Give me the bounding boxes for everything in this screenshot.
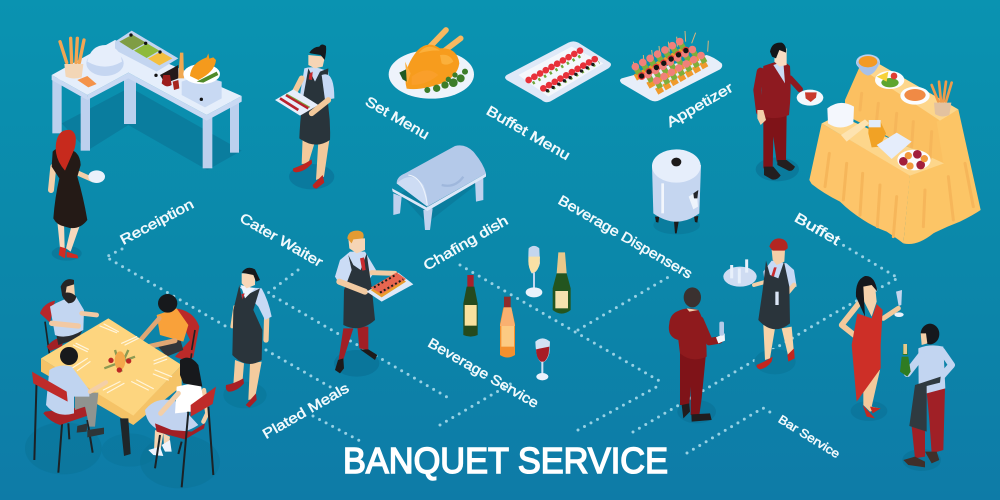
illustration: draped buffet table — [809, 54, 981, 244]
orange wine bottle — [500, 297, 515, 357]
illustration: appetizer tray — [620, 31, 722, 101]
figure: waitress with black apron standing — [223, 268, 272, 408]
champagne flute — [526, 246, 542, 297]
label: Buffet Menu: Buffet Menu — [484, 102, 573, 163]
dotted connector lines — [106, 245, 898, 453]
buffet food items — [827, 54, 952, 170]
illustration: buffet menu skewers tray — [505, 41, 611, 102]
label: Chafing dish: Chafing dish — [420, 212, 511, 273]
dining table top — [41, 358, 182, 425]
figure: waiter with appetizer tray — [334, 231, 413, 377]
illustration: roast chicken set menu — [389, 30, 474, 99]
label: Beverage Dispensers: Beverage Dispensers — [556, 192, 695, 282]
figure: waitress carrying canapes — [275, 44, 334, 189]
title: BANQUET SERVICE — [343, 440, 668, 481]
label: Set Menu: Set Menu — [363, 93, 432, 142]
champagne bottle — [553, 252, 571, 314]
front-left diner on chair — [32, 347, 106, 473]
figure: bartender with champagne — [900, 324, 952, 471]
figure: woman in red dress — [842, 276, 904, 421]
label: Beverage Service: Beverage Service — [425, 334, 542, 411]
front-right diner on chair — [145, 358, 216, 487]
label: Appetizer: Appetizer — [663, 79, 736, 130]
label: Plated Meals: Plated Meals — [259, 379, 352, 442]
label: Bar Service: Bar Service — [776, 412, 843, 461]
table flowers — [104, 350, 135, 373]
illustration: wine bottles and glasses — [463, 246, 571, 380]
figure: man in red suit with plate — [756, 43, 823, 181]
back-left chair and bearded man — [40, 279, 97, 353]
back-right diner — [132, 294, 199, 365]
figure: waitress with glasses on tray — [723, 238, 797, 374]
illustration: buffet table with food — [52, 31, 242, 170]
label: Cater Waiter: Cater Waiter — [237, 209, 326, 270]
figure: man in red suit seen from back — [669, 287, 725, 423]
figure: woman with red hair — [51, 130, 105, 261]
illustration: chafing dish — [392, 145, 487, 230]
figure: seated diners at table — [25, 279, 220, 488]
label: Receiption: Receiption — [117, 196, 196, 248]
illustration: beverage dispenser — [652, 149, 701, 234]
red wine glass — [535, 338, 550, 380]
green wine bottle — [463, 275, 478, 337]
label: Buffet: Buffet — [792, 209, 843, 248]
